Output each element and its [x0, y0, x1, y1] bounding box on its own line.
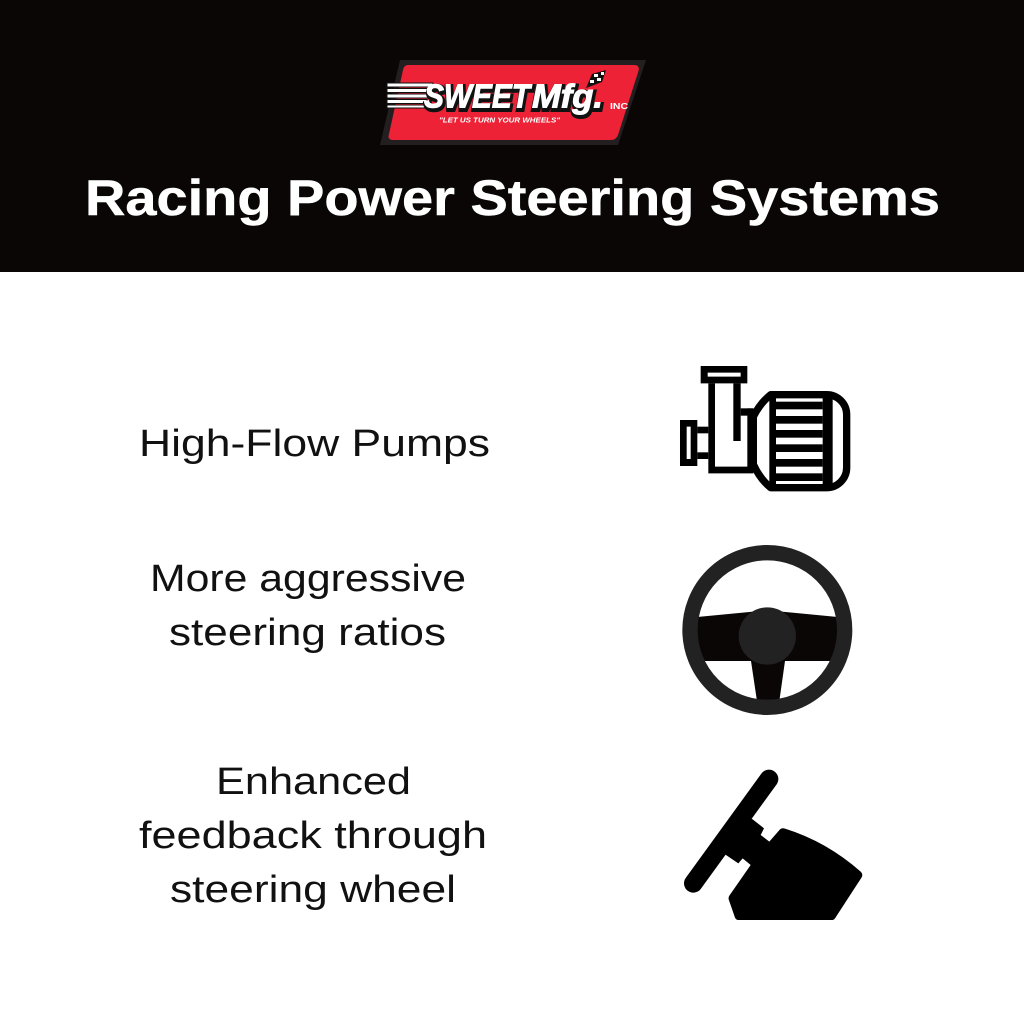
- logo: Mfg.: [532, 78, 603, 114]
- text: enhanced feedback through steering wheel: Enhanced: [216, 761, 411, 803]
- logo: Mfg.: [533, 80, 604, 116]
- logo: SWEET: [424, 78, 533, 114]
- icon: steering column: [693, 779, 862, 920]
- title: Racing Power Steering Systems: [85, 170, 940, 226]
- logo: "LET US TURN YOUR WHEELS": [439, 116, 560, 124]
- icon: pump: [680, 366, 847, 488]
- text: more aggressive steering ratios: More aggressive: [150, 558, 466, 600]
- text: high-flow pumps: High-Flow Pumps: [139, 423, 490, 465]
- logo: SWEET: [425, 80, 534, 116]
- logo: [380, 60, 646, 145]
- text: enhanced feedback through steering wheel: [139, 761, 487, 911]
- text: enhanced feedback through steering wheel: feedback through: [139, 815, 487, 857]
- icon: steering wheel: [690, 553, 845, 707]
- text: enhanced feedback through steering wheel: steering wheel: [170, 869, 456, 911]
- logo: INC: [610, 101, 628, 111]
- text: more aggressive steering ratios: steering ratios: [169, 612, 446, 654]
- header panel: [0, 0, 1024, 272]
- checkered flag: [586, 70, 606, 88]
- text: more aggressive steering ratios: [150, 558, 466, 654]
